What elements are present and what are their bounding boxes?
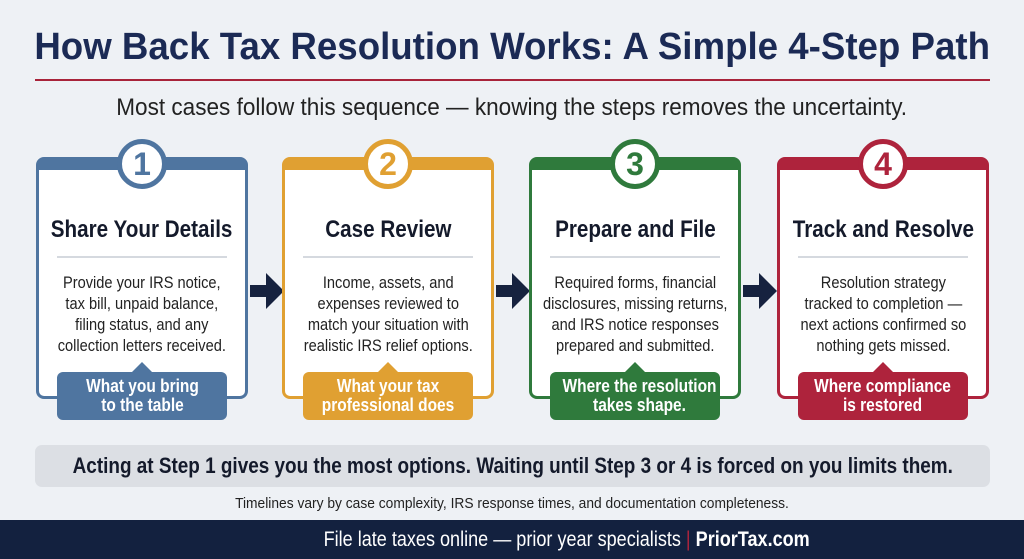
text: step 3 <box>543 273 727 355</box>
heading: step 4: Track and Resolve <box>792 216 974 243</box>
footer: File late taxes online — prior year specialists | PriorTax.com <box>324 528 810 551</box>
text: step 1: filing status, and any <box>75 315 209 334</box>
icon: number 1 <box>117 139 167 189</box>
text: step 3: prepared and submitted. <box>556 336 714 355</box>
badge: step 3 <box>550 372 720 420</box>
panel: step 3 <box>529 157 741 399</box>
arrow 3 <box>743 273 777 309</box>
badge: step 2: professional does <box>322 395 454 415</box>
text: step 2: realistic IRS relief options. <box>303 336 473 355</box>
heading: step 3: Prepare and File <box>555 216 715 243</box>
text: step 4: Resolution strategy <box>820 273 946 292</box>
heading: step 1: Share Your Details <box>51 216 233 243</box>
icon: number 2 <box>363 139 413 189</box>
badge: step 4: Where compliance <box>815 376 951 396</box>
text: step 1: collection letters received. <box>58 336 226 355</box>
badge: step 1: to the table <box>101 395 183 415</box>
panel: step 4 <box>777 157 989 399</box>
badge: step 2: What your tax <box>337 376 439 396</box>
text: step 3: disclosures, missing returns, <box>543 294 727 313</box>
footer <box>0 520 1024 559</box>
text: step 2: expenses reviewed to <box>317 294 459 313</box>
badge: step 3: takes shape. <box>593 395 686 415</box>
arrow 1 <box>250 273 282 309</box>
text: step 4 <box>800 273 966 355</box>
icon: number 2: 2 <box>379 146 397 182</box>
subtitle: Most cases follow this sequence — knowing the steps removes the uncertainty. <box>117 94 907 121</box>
icon: number 1: 1 <box>133 146 151 182</box>
badge: step 4 <box>798 372 968 420</box>
badge: step 1 <box>57 372 227 420</box>
badge: step 3: Where the resolution <box>563 376 716 396</box>
badge: step 2 <box>303 372 473 420</box>
text: step 3: Required forms, financial <box>554 273 716 292</box>
text: step 2 <box>303 273 473 355</box>
text: step 2: match your situation with <box>308 315 468 334</box>
title: How Back Tax Resolution Works: A Simple 4-Step Path <box>34 26 990 68</box>
callout banner <box>35 445 990 487</box>
panel: step 2 <box>282 157 494 399</box>
arrow 2 <box>496 273 529 309</box>
text: step 2: Income, assets, and <box>323 273 453 292</box>
icon: number 3 <box>610 139 660 189</box>
badge: step 1: What you bring <box>86 376 198 396</box>
text: step 4: next actions confirmed so <box>800 315 966 334</box>
heading: step 2: Case Review <box>325 216 451 243</box>
text: step 1: tax bill, unpaid balance, <box>66 294 218 313</box>
text: step 4: nothing gets missed. <box>816 336 950 355</box>
text: step 1 <box>58 273 226 355</box>
footnote: Timelines vary by case complexity, IRS response times, and documentation completeness. <box>235 495 789 512</box>
text: step 1: Provide your IRS notice, <box>63 273 221 292</box>
badge: step 4: is restored <box>843 395 923 415</box>
icon: number 4: 4 <box>874 146 892 182</box>
panel: step 1 <box>36 157 248 399</box>
icon: number 3: 3 <box>626 146 644 182</box>
icon: number 4 <box>858 139 908 189</box>
callout banner: Acting at Step 1 gives you the most options. Waiting until Step 3 or 4 is forced on you limits them. <box>72 453 953 478</box>
text: step 3: and IRS notice responses <box>551 315 719 334</box>
text: step 4: tracked to completion — <box>804 294 962 313</box>
